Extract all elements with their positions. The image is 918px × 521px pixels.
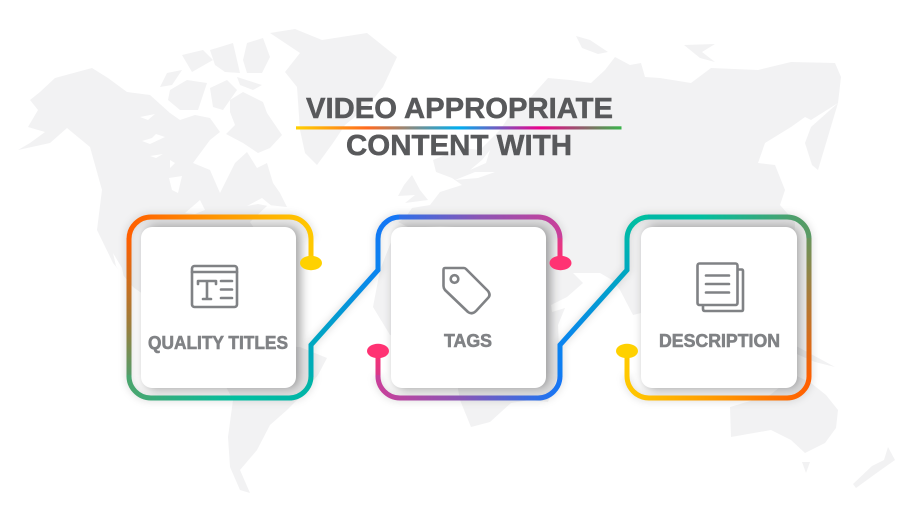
title bbox=[306, 93, 613, 162]
label: quality titles: QUALITY TITLES bbox=[148, 333, 288, 353]
card 3 shadow bbox=[644, 225, 801, 390]
map: northern islands and UK bbox=[398, 36, 715, 203]
map: Indonesia and Australia bbox=[730, 340, 838, 453]
map: Arctic archipelago bbox=[160, 38, 282, 153]
label: description: DESCRIPTION bbox=[659, 331, 780, 351]
map: Africa bbox=[373, 230, 565, 427]
connector line: lower path bbox=[378, 217, 809, 398]
map: Greenland bbox=[270, 29, 397, 165]
map: lakes and inlets bbox=[113, 114, 495, 278]
connector dot: yellow, card 1 bbox=[300, 256, 322, 270]
connector dot: pink, card 2 bottom bbox=[367, 344, 389, 358]
card 2 shadow bbox=[394, 225, 551, 390]
connector dot: yellow, card 3 bbox=[616, 344, 638, 358]
icon: document pages bbox=[698, 264, 743, 311]
icon: price tag bbox=[444, 268, 490, 313]
map: Kamchatka and Japan bbox=[805, 103, 838, 170]
card 2 bbox=[391, 227, 546, 388]
title gradient underline bbox=[296, 126, 622, 130]
connector line: upper path bbox=[129, 217, 560, 398]
map: Tasmania and New Zealand bbox=[802, 447, 895, 488]
label: tags: TAGS bbox=[444, 331, 492, 351]
panel: tags bbox=[391, 225, 551, 390]
title line 2: CONTENT WITH bbox=[346, 130, 572, 162]
panel: description bbox=[641, 225, 801, 390]
icon: title text window bbox=[192, 266, 237, 307]
map: South America bbox=[225, 345, 327, 493]
card 3 bbox=[641, 227, 797, 388]
title line 1: VIDEO APPROPRIATE bbox=[306, 93, 613, 125]
connector dot: pink, card 2 top bbox=[550, 256, 572, 270]
panel: quality titles bbox=[141, 225, 301, 390]
map: Eurasia bbox=[398, 57, 841, 345]
card 1 shadow bbox=[144, 225, 301, 390]
card 1 bbox=[141, 227, 296, 388]
map: North America bbox=[18, 68, 287, 310]
panel shadows: connector depth bbox=[129, 217, 809, 398]
